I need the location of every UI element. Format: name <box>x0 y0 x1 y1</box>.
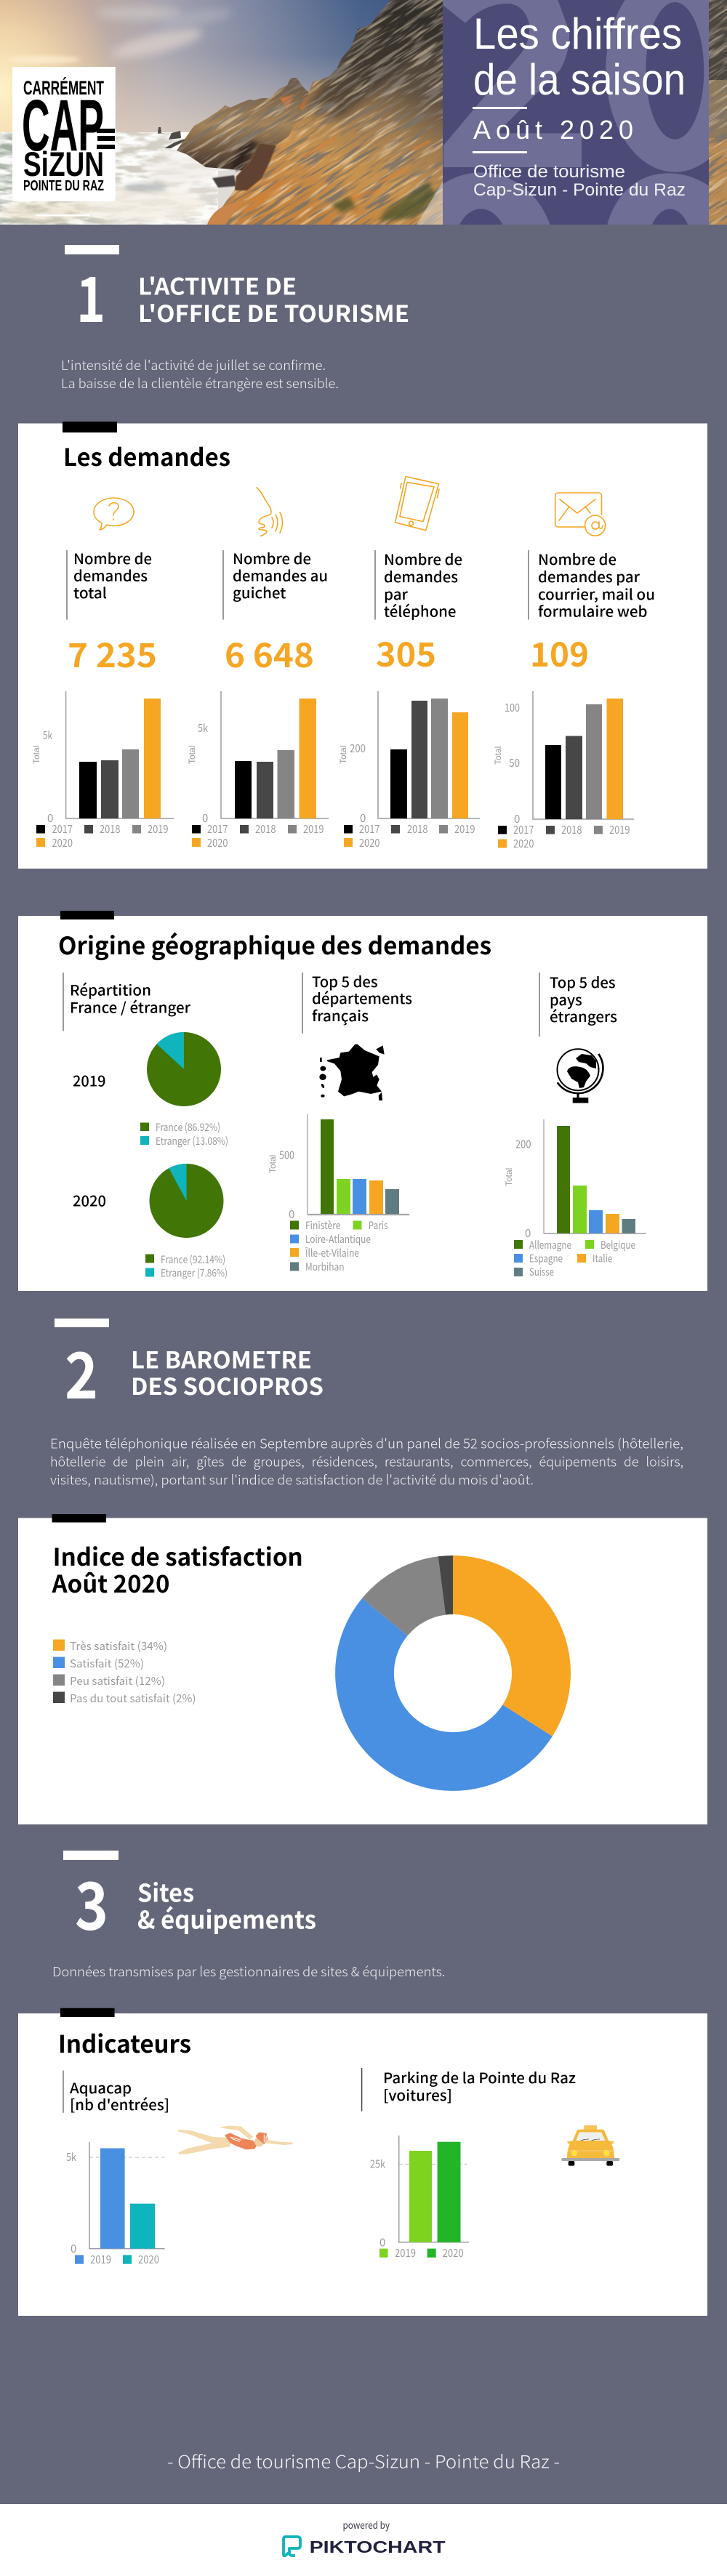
section 2 intro: Enquête téléphonique réalisée en Septembre auprès d'un panel de 52 socios-professionnels (hôtellerie, <box>50 1434 683 1453</box>
bar chart: parking: 2020 <box>443 2245 464 2261</box>
section 2 heading <box>55 1319 324 1417</box>
legend 2019 <box>140 1119 228 1148</box>
icon: map of France <box>319 1045 385 1100</box>
bar chart: aquacap: 5k <box>66 2149 77 2165</box>
white rule on photo <box>36 214 90 217</box>
bar chart: guichet: 2017 <box>207 821 228 837</box>
legend: satisfaction: Pas du tout satisfait (2%) <box>70 1691 196 1706</box>
bar chart: total: 2019 <box>148 821 169 837</box>
logo: Carrément Cap-Sizun: POINTE DU RAZ <box>23 178 104 194</box>
bar chart: departements: Paris <box>369 1217 388 1233</box>
section 1 heading: L'ACTIVITE DE <box>138 269 297 302</box>
bar chart: courrier <box>493 691 634 851</box>
icon: nose and sound <box>257 488 282 536</box>
bar chart: guichet: 2019 <box>303 821 324 837</box>
bar chart: telephone: 2019 <box>454 821 475 837</box>
label: parking: [voitures] <box>383 2084 452 2105</box>
column 2 label: Nombre de <box>233 547 311 568</box>
bar chart: total: 0 <box>47 810 53 826</box>
column 2 label: guichet <box>233 581 286 603</box>
bar chart: courrier: 2017 <box>513 822 534 837</box>
label: parking: Parking de la Pointe du Raz <box>383 2066 576 2088</box>
icon: question bubble <box>94 498 134 530</box>
bar chart: departements: Morbihan <box>305 1259 345 1274</box>
section 1 intro: L'intensité de l'activité de juillet se confirme. <box>61 355 326 374</box>
column 3 label: par <box>384 583 409 604</box>
heading: indice: Août 2020 <box>52 1565 170 1600</box>
bar chart: guichet: 5k <box>198 720 209 736</box>
panel: origine geographique <box>18 911 707 1291</box>
bar chart: pays: 0 <box>525 1225 531 1241</box>
date: Août 2020 <box>473 115 633 145</box>
heading: les demandes: Les demandes <box>63 438 230 473</box>
section 1 intro <box>61 355 339 393</box>
column 3 label <box>375 548 462 621</box>
bar chart: courrier: 50 <box>509 755 520 770</box>
bar chart: pays <box>504 1119 646 1279</box>
bar chart: total: 5k <box>43 728 53 743</box>
bar chart: courrier: 2018 <box>561 822 582 837</box>
heading: indice: Indice de satisfaction <box>53 1538 303 1573</box>
label: aquacap: Aquacap <box>70 2077 132 2098</box>
organisation <box>473 162 686 200</box>
column 1 label: total <box>73 581 107 603</box>
label: aquacap: [nb d'entrées] <box>70 2093 169 2114</box>
bar chart: total: 2018 <box>100 821 121 837</box>
label: top departements: départements <box>312 987 412 1008</box>
organisation: Cap-Sizun - Pointe du Raz <box>473 180 686 200</box>
bar chart: courrier: 100 <box>505 700 520 715</box>
section 1 heading <box>65 245 409 340</box>
bar chart: courrier: 2020 <box>513 836 534 851</box>
label: top departements: Top 5 des <box>312 970 378 991</box>
column 1 label: demandes <box>73 564 148 586</box>
bar chart: parking: 25k <box>370 2156 386 2171</box>
column 1 label <box>67 547 152 619</box>
main title: Les chiffres <box>473 9 682 58</box>
key figures: 7 235 <box>68 629 157 677</box>
bar chart: aquacap <box>66 2142 164 2267</box>
label 2019: 2019 <box>73 1070 106 1090</box>
column 4 label: demandes par <box>538 565 640 587</box>
legend 2019: France (86.92%) <box>156 1119 220 1135</box>
legend 2020: France (92.14%) <box>161 1252 225 1267</box>
bar chart: courrier: 2019 <box>609 822 630 837</box>
section 3 heading: Sites <box>137 1874 194 1909</box>
section 3 heading <box>63 1851 316 1948</box>
bar chart: parking: 2019 <box>395 2245 416 2261</box>
bar chart: departements <box>268 1114 409 1274</box>
logo: Carrément Cap-Sizun: CARRÉMENT <box>23 76 104 99</box>
column 2 label <box>223 547 328 619</box>
column 4 label: formulaire web <box>538 600 647 621</box>
bar chart: aquacap: 2019 <box>90 2252 111 2267</box>
bar chart: departements: Îlle-et-Vilaine <box>305 1245 359 1260</box>
header photo <box>0 0 727 225</box>
column 3 label: demandes <box>384 565 458 587</box>
label: top pays: Top 5 des <box>550 971 616 992</box>
key figures: 305 <box>376 629 436 677</box>
label: top pays <box>539 971 617 1037</box>
section 3 heading: & équipements <box>137 1901 316 1936</box>
heading: indice <box>52 1538 303 1600</box>
bar chart: aquacap: 0 <box>71 2241 76 2256</box>
main title: de la saison <box>473 55 686 104</box>
footer band <box>0 2504 727 2576</box>
icon: smartphone <box>395 477 439 531</box>
section 2 intro: visites, nautisme), portant sur l'indice de satisfaction de l'activité du mois d'août. <box>50 1470 534 1489</box>
bar chart: pays: Espagne <box>529 1250 563 1266</box>
donut chart <box>335 1555 571 1791</box>
icon: taxi <box>561 2125 619 2166</box>
bar chart: departements: Total <box>268 1155 278 1173</box>
section 2 heading: 2 <box>65 1325 98 1417</box>
piktochart logo: PIKTOCHART <box>310 2537 446 2556</box>
logo: Carrément Cap-Sizun: SiZUN <box>23 145 104 183</box>
legend 2020 <box>145 1252 228 1281</box>
bar chart: total: 2017 <box>52 821 73 837</box>
logo: Carrément Cap-Sizun <box>12 67 116 201</box>
label: repartition: Répartition <box>70 979 151 1000</box>
bar chart: guichet: 2020 <box>207 835 228 850</box>
bar chart: telephone: Total <box>338 746 348 764</box>
bar chart: total: 2020 <box>52 835 73 850</box>
column 3 label: Nombre de <box>384 548 462 569</box>
legend: satisfaction: Satisfait (52%) <box>70 1656 144 1671</box>
bar chart: telephone: 2018 <box>407 821 427 837</box>
bar chart: telephone: 2017 <box>359 821 379 837</box>
label: aquacap <box>63 2071 169 2114</box>
section 1 intro: La baisse de la clientèle étrangère est sensible. <box>61 374 339 393</box>
key figures <box>68 629 589 677</box>
label: parking <box>362 2066 576 2112</box>
label: top departements: français <box>312 1005 369 1026</box>
bar chart: pays: Suisse <box>529 1264 554 1279</box>
section 2 heading: LE BAROMETRE <box>131 1343 312 1376</box>
bar chart: guichet: 2018 <box>255 821 276 837</box>
bar chart: departements: Loire-Atlantique <box>305 1231 371 1247</box>
heading: indicateurs: Indicateurs <box>58 2025 191 2060</box>
legend: satisfaction: Très satisfait (34%) <box>70 1638 167 1654</box>
column 4 label: Nombre de <box>538 548 616 569</box>
powered by: powered by <box>343 2518 390 2532</box>
key figures: 6 648 <box>225 629 314 677</box>
logo: Carrément Cap-Sizun: CAP <box>22 85 104 166</box>
bar chart: telephone: 200 <box>350 741 366 756</box>
heading: origine: Origine géographique des demandes <box>58 927 491 962</box>
bar chart: departements: 500 <box>279 1147 294 1163</box>
label: top pays: pays <box>550 989 582 1010</box>
title panel <box>443 0 709 225</box>
section 1 heading: L'OFFICE DE TOURISME <box>138 296 409 329</box>
pie chart 2020 <box>150 1164 224 1238</box>
panel: indice de satisfaction <box>18 1514 707 1824</box>
section 3 heading: 3 <box>75 1853 108 1948</box>
label 2020: 2020 <box>73 1189 106 1211</box>
section 1 heading: 1 <box>76 249 105 340</box>
legend 2019: Etranger (13.08%) <box>156 1133 228 1148</box>
bar chart: pays: Belgique <box>601 1237 635 1252</box>
label: top departements <box>302 970 412 1034</box>
bar chart: guichet <box>187 691 329 850</box>
bar chart: courrier: 0 <box>514 811 520 826</box>
main title <box>473 9 686 104</box>
panel: indicateurs <box>18 2008 707 2316</box>
bar chart: pays: Italie <box>593 1250 612 1266</box>
bar chart: departements: Finistère <box>305 1217 340 1233</box>
bar chart: courrier: Total <box>493 746 503 765</box>
label: top pays: étrangers <box>550 1005 617 1026</box>
legend: satisfaction: Peu satisfait (12%) <box>70 1673 165 1689</box>
column 4 label: courrier, mail ou <box>538 583 655 604</box>
bar chart: total <box>31 691 174 850</box>
legend 2020: Etranger (7.86%) <box>161 1265 228 1281</box>
bar chart: telephone: 2020 <box>359 835 379 850</box>
bar chart: guichet: 0 <box>202 810 208 826</box>
bar chart: aquacap: 2020 <box>138 2252 159 2267</box>
section 2 intro: hôtellerie de plein air, gîtes de groupes, résidences, restaurants, commerces, équipements de loisirs, <box>50 1452 683 1471</box>
bar chart: departements: 0 <box>289 1207 294 1222</box>
organisation: Office de tourisme <box>473 162 625 182</box>
icon: swimmer <box>177 2125 293 2154</box>
icon: mail with at sign <box>555 493 606 536</box>
piktochart logo <box>284 2537 446 2556</box>
bar chart: parking <box>370 2136 469 2261</box>
column 4 label <box>529 548 655 621</box>
footer text: - Office de tourisme Cap-Sizun - Pointe du Raz - <box>167 2448 560 2474</box>
icon: globe <box>557 1049 603 1103</box>
pie chart 2019 <box>147 1032 221 1106</box>
column 1 label: Nombre de <box>73 547 152 568</box>
bar chart: pays: 200 <box>515 1137 531 1151</box>
panel: les demandes <box>18 422 707 869</box>
section 2 intro <box>50 1434 683 1489</box>
section 2 heading: DES SOCIOPROS <box>131 1369 324 1402</box>
bar chart: telephone: 0 <box>360 810 366 826</box>
bar chart: total: Total <box>31 746 41 764</box>
bar chart: pays: Total <box>504 1168 514 1186</box>
label: repartition <box>63 973 191 1031</box>
bar chart: guichet: Total <box>187 746 197 764</box>
legend: satisfaction <box>53 1638 196 1706</box>
label: repartition: France / étranger <box>70 996 191 1018</box>
section 3 intro: Données transmises par les gestionnaires de sites & équipements. <box>52 1962 445 1981</box>
bar chart: telephone <box>338 691 480 850</box>
key figures: 109 <box>530 629 589 677</box>
bar chart: parking: 0 <box>379 2235 385 2250</box>
bar chart: pays: Allemagne <box>529 1237 571 1252</box>
column 2 label: demandes au <box>233 564 328 586</box>
column 3 label: téléphone <box>384 600 457 621</box>
